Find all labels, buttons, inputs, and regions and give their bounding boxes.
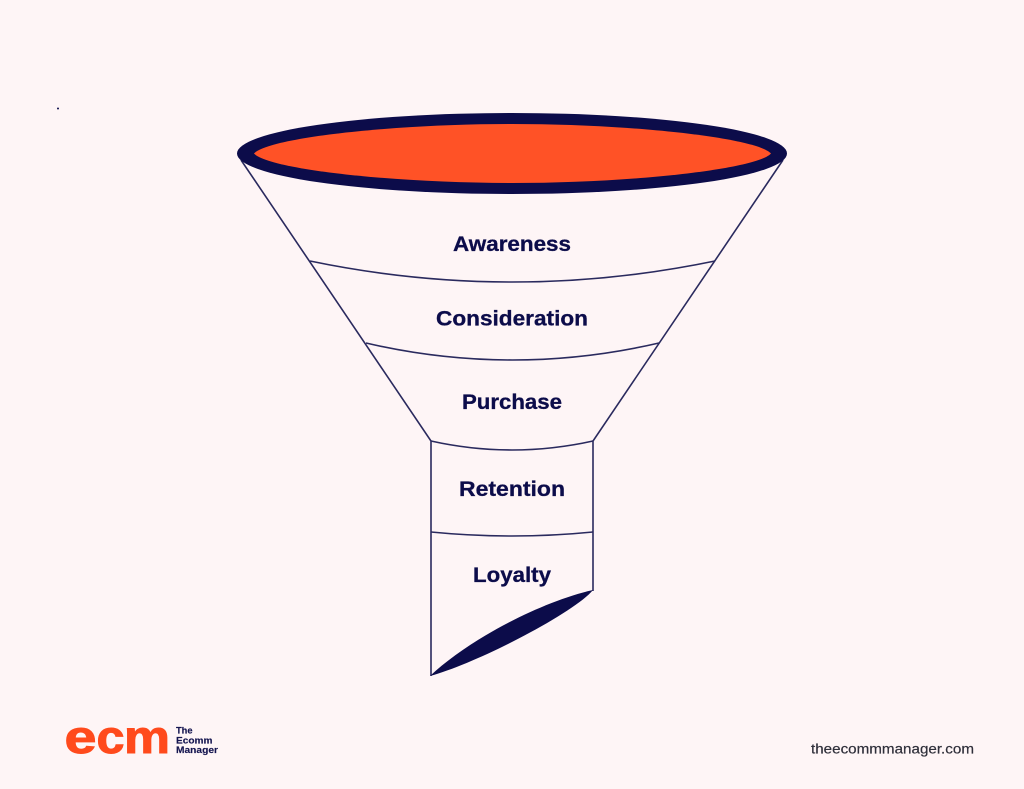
website url: theecommmanager.com (811, 742, 974, 756)
logo tagline: Ecomm (176, 735, 212, 746)
funnel outline (241, 160, 783, 676)
divider: consideration and purchase (366, 343, 659, 360)
funnel rim (237, 113, 787, 194)
rim outer ellipse (237, 113, 787, 194)
divider: awareness and consideration (310, 261, 715, 282)
funnel (237, 113, 787, 676)
logo wordmark: c (96, 711, 124, 763)
funnel bottom opening (430, 590, 593, 676)
stray dot (57, 108, 59, 110)
logo wordmark (64, 711, 170, 763)
rim orange opening (254, 124, 771, 183)
divider: purchase and retention (431, 441, 593, 450)
divider: retention and loyalty (431, 532, 593, 536)
label: Loyalty: Loyalty (473, 564, 551, 587)
label: Retention: Retention (459, 478, 565, 501)
logo (64, 711, 218, 763)
logo tagline: The (176, 726, 192, 736)
label: Awareness: Awareness (453, 233, 571, 256)
logo tagline: Manager (176, 745, 218, 756)
label: Consideration: Consideration (436, 308, 588, 330)
label: Purchase: Purchase (462, 391, 562, 414)
logo wordmark: m (124, 711, 170, 763)
logo wordmark: e (64, 711, 96, 763)
logo tagline (176, 726, 218, 756)
